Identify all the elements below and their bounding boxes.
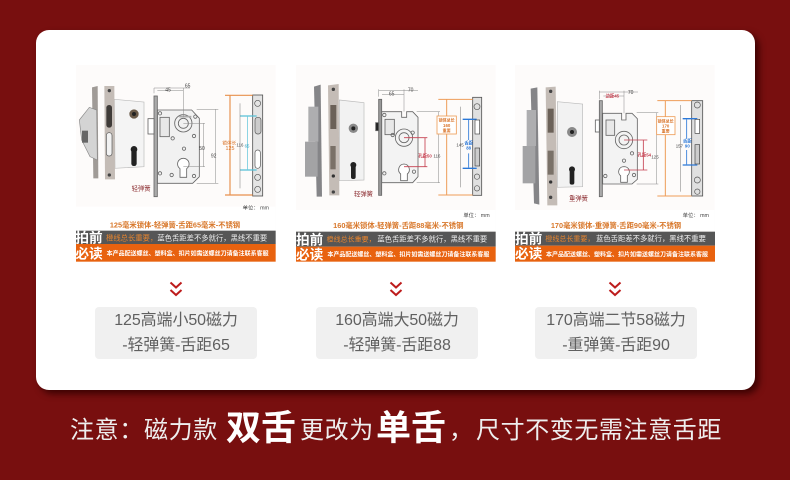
notice banner: 必读: [75, 246, 103, 262]
panel: 125 lock image: 92: [211, 153, 217, 159]
option label: 125: 125高端小50磁力: [114, 312, 238, 329]
panel: 170 lock image: 90: [685, 144, 690, 149]
option label: 170: -重弹簧-舌距90: [562, 337, 670, 354]
notice banner: [296, 231, 496, 262]
notice banner: 拍前: [75, 230, 103, 246]
spring label: 轻弹簧: [132, 183, 151, 192]
panel: 160 lock image: 单位： mm: [463, 211, 490, 219]
caption: 170毫米锁体-重弹簧-舌距90毫米-不锈钢: [551, 221, 681, 230]
notice banner: 蓝色舌距差不多就行，黑线不重要: [157, 233, 267, 242]
technical drawing: front: [148, 88, 218, 197]
panel: 160 lock image: 160: [443, 123, 451, 128]
spring label: 轻弹簧: [354, 189, 374, 198]
caption: 160毫米锁体-轻弹簧-舌距88毫米-不锈钢: [333, 221, 463, 230]
panel: 160 lock image: 重要: [443, 127, 451, 133]
footer note: 磁力款: [144, 417, 218, 444]
panel: 160 lock image: 舌距: [464, 139, 474, 146]
footer note: 单舌: [376, 409, 446, 448]
panel: 170 lock image: 70: [628, 90, 634, 96]
lock photo: front view: [328, 84, 364, 195]
notice banner: 必读: [296, 246, 324, 262]
technical drawing: faceplate dimensions: [438, 97, 482, 195]
panel: 125 lock image: 65: [185, 83, 191, 89]
icon: double chevron 2: [390, 282, 402, 296]
panel: 160 lock image: 70: [408, 88, 414, 94]
notice banner: 拍前: [515, 231, 543, 247]
panel: 125 lock image: 116: [237, 142, 244, 147]
icon: double chevron 1: [170, 282, 182, 296]
notice banner: 橙线总长重要，: [545, 234, 594, 243]
panel: 160 lock image: 65: [389, 91, 395, 97]
panel: 160 lock image: [296, 84, 496, 262]
lock photo: front view: [546, 87, 583, 205]
option label: 170: [535, 307, 697, 359]
panel: 125 lock image: 单位： mm: [243, 204, 270, 212]
panel: 170 lock image: 锁体总长: [658, 117, 674, 123]
panel: 160 lock image: 145: [456, 143, 464, 148]
panel: 125 lock image: 65: [245, 143, 250, 148]
panel: 170 lock image: 舌距: [683, 138, 692, 145]
footer note: ，: [449, 417, 474, 444]
caption: 125毫米锁体-轻弹簧-舌距65毫米-不锈钢: [110, 220, 240, 229]
notice banner: 必读: [515, 246, 543, 262]
technical drawing: faceplate dimensions: [225, 95, 263, 196]
panel: 170 lock image: 157: [676, 143, 684, 148]
spring label: 重弹簧: [569, 193, 589, 202]
notice banner: 拍前: [296, 231, 324, 247]
footer note: 双舌: [226, 409, 296, 448]
footer note: 尺寸不变无需注意舌距: [476, 417, 722, 444]
panel: 170 lock image: 170: [662, 124, 670, 129]
lock photo: front view: [104, 86, 144, 179]
notice banner: [515, 231, 715, 262]
option label: 160: [316, 307, 478, 359]
technical drawing: front: [376, 89, 440, 195]
panel: 160 lock image: 孔距50: [418, 152, 432, 159]
notice banner: [75, 230, 276, 262]
panel: 170 lock image: 单位： mm: [683, 211, 710, 219]
lock photo: side view: [523, 87, 539, 205]
option label: 160: -轻弹簧-舌距88: [343, 337, 451, 354]
lock photo: side view: [79, 86, 98, 178]
notice banner: 蓝色舌距差不多就行，黑线不重要: [377, 234, 487, 243]
icon: double chevron 3: [608, 282, 622, 296]
panel: 125 lock image: 45: [165, 88, 171, 94]
notice banner: 橙线总长重要，: [106, 233, 157, 242]
panel: 170 lock image: [515, 86, 715, 262]
option label: 160: 160高端大50磁力: [335, 312, 459, 329]
panel: 125 lock image: [75, 83, 276, 262]
panel: 125 lock image: 50: [199, 146, 205, 152]
white card: [36, 30, 755, 390]
notice banner: 本产品配送螺丝、塑料盒、扣片如需送螺丝刀请备注联系客服: [327, 250, 489, 258]
panel: 170 lock image: 边距45: [606, 93, 620, 100]
technical drawing: front: [595, 91, 658, 197]
notice banner: 本产品配送螺丝、塑料盒、扣片如需送螺丝刀请备注联系客服: [107, 250, 269, 258]
technical drawing: faceplate dimensions: [657, 101, 703, 196]
lock photo: side view: [305, 85, 322, 197]
notice banner: 本产品配送螺丝、塑料盒、扣片如需送螺丝刀请备注联系客服: [546, 250, 708, 258]
notice banner: 蓝色舌距差不多就行，黑线不重要: [596, 234, 706, 243]
notice banner: 橙线总长重要，: [327, 234, 376, 243]
footer note: 更改为: [300, 417, 374, 444]
option label: 125: [95, 307, 257, 359]
panel: 125 lock image: 125: [226, 146, 234, 152]
panel: 125 lock image: 锁体长: [222, 140, 237, 147]
footer note: [70, 409, 722, 448]
footer note: 注意：: [70, 417, 144, 444]
panel: 160 lock image: 116: [434, 153, 441, 158]
option label: 170: 170高端二节58磁力: [546, 312, 686, 329]
option label: 125: -轻弹簧-舌距65: [122, 337, 230, 354]
panel: 170 lock image: 125: [651, 154, 659, 159]
panel: 160 lock image: 锁体总长: [439, 117, 455, 123]
panel: 170 lock image: 孔距54: [638, 152, 652, 159]
panel: 160 lock image: 88: [466, 145, 472, 150]
panel: 170 lock image: 重要: [662, 128, 670, 134]
